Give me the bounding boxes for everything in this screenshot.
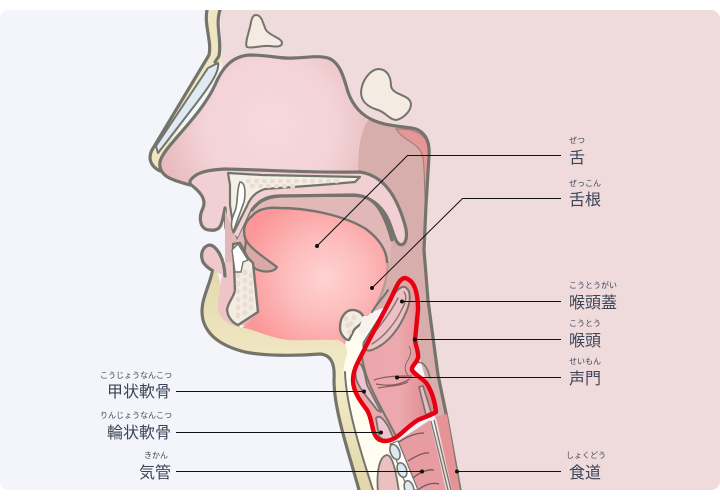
label: 喉頭蓋: こうとうがい <box>569 280 617 290</box>
airway front line <box>362 356 396 436</box>
label: 声門: 声門 <box>569 370 601 388</box>
label: 舌 <box>315 136 585 248</box>
neck inner line <box>345 372 373 490</box>
bone texture <box>248 181 338 186</box>
thyroid cartilage <box>355 363 381 412</box>
label: 舌根 <box>370 179 601 290</box>
tracheal rings <box>399 433 439 490</box>
epiglottis <box>363 287 410 351</box>
mucosa strip <box>396 129 429 208</box>
nasal cavity and spine wall outline <box>160 55 460 490</box>
label: 食道 <box>455 451 606 482</box>
glottis folds <box>374 376 412 388</box>
palate and upper lip <box>190 169 406 245</box>
label: 舌根: 舌根 <box>569 191 601 209</box>
trachea rear wall lines <box>431 420 451 490</box>
pharynx wall <box>358 120 447 420</box>
lower gum tissue <box>218 262 240 328</box>
tongue back edge <box>372 262 388 312</box>
label: 舌: ぜつ <box>569 136 585 145</box>
nasal cartilage <box>156 63 218 153</box>
lower tooth <box>232 244 248 272</box>
label: 気管 <box>139 451 424 482</box>
esophagus <box>436 414 460 490</box>
label: 喉頭: 喉頭 <box>569 332 601 350</box>
mandible texture <box>238 272 251 318</box>
label: 輪状軟骨 <box>100 411 383 442</box>
hard palate bone <box>228 173 360 232</box>
epiglottis inner fold <box>370 292 406 344</box>
back arytenoid arc <box>416 362 430 378</box>
label: 喉頭 <box>413 319 601 350</box>
label: 気管: きかん <box>144 451 168 460</box>
hyoid bone <box>340 310 364 340</box>
nasal cavity <box>160 55 368 185</box>
larynx interior <box>353 278 436 442</box>
upper tooth <box>231 182 245 232</box>
tongue outline <box>244 208 387 262</box>
skin band: forehead and nose <box>150 10 222 176</box>
cricoid cartilage <box>376 417 393 440</box>
lower lip <box>202 245 225 276</box>
tracheal cartilage chain <box>388 441 418 497</box>
label: 舌根: ぜっこん <box>569 179 601 188</box>
thyroid gland <box>377 455 399 492</box>
mandible bone <box>227 243 258 325</box>
label: 気管: 気管 <box>139 464 171 482</box>
skull bone: sphenoid lower <box>361 69 411 120</box>
label: 舌: 舌 <box>569 149 585 167</box>
label: 声門 <box>395 357 601 388</box>
label: 輪状軟骨: 輪状軟骨 <box>107 424 171 442</box>
tissue: head and back of neck <box>220 10 720 490</box>
arytenoid fold <box>405 346 411 375</box>
label: 喉頭蓋 <box>400 280 617 312</box>
label: 輪状軟骨: りんじょうなんこつ <box>100 411 172 420</box>
oral cavity <box>225 197 392 338</box>
nose outer line <box>150 10 210 171</box>
label: 甲状軟骨: こうじょうなんこつ <box>100 371 172 380</box>
nose inner line <box>215 10 220 62</box>
label: 食道: しょくどう <box>566 451 606 460</box>
epiglottis ligament <box>358 316 377 338</box>
skull bone: sphenoid upper <box>246 15 282 48</box>
trachea <box>398 420 446 490</box>
label: 甲状軟骨 <box>100 371 366 401</box>
label: 喉頭蓋: 喉頭蓋 <box>569 294 617 312</box>
hyoid texture <box>346 317 354 334</box>
label: 喉頭: こうとう <box>569 319 601 328</box>
tongue <box>238 208 388 345</box>
larynx highlight: red outline <box>353 278 436 441</box>
label: 声門: せいもん <box>569 357 601 366</box>
chin and neck skin band <box>203 270 372 490</box>
neck cream tissue <box>344 318 404 490</box>
floor of mouth <box>244 240 277 271</box>
head and neck illustration <box>150 10 720 497</box>
palate inner line <box>252 195 392 240</box>
posterior cricoid <box>419 386 431 415</box>
hyoid membrane line <box>372 290 388 312</box>
label: 食道: 食道 <box>569 464 601 482</box>
label: 甲状軟骨: 甲状軟骨 <box>107 383 171 401</box>
chin outline <box>202 273 359 490</box>
